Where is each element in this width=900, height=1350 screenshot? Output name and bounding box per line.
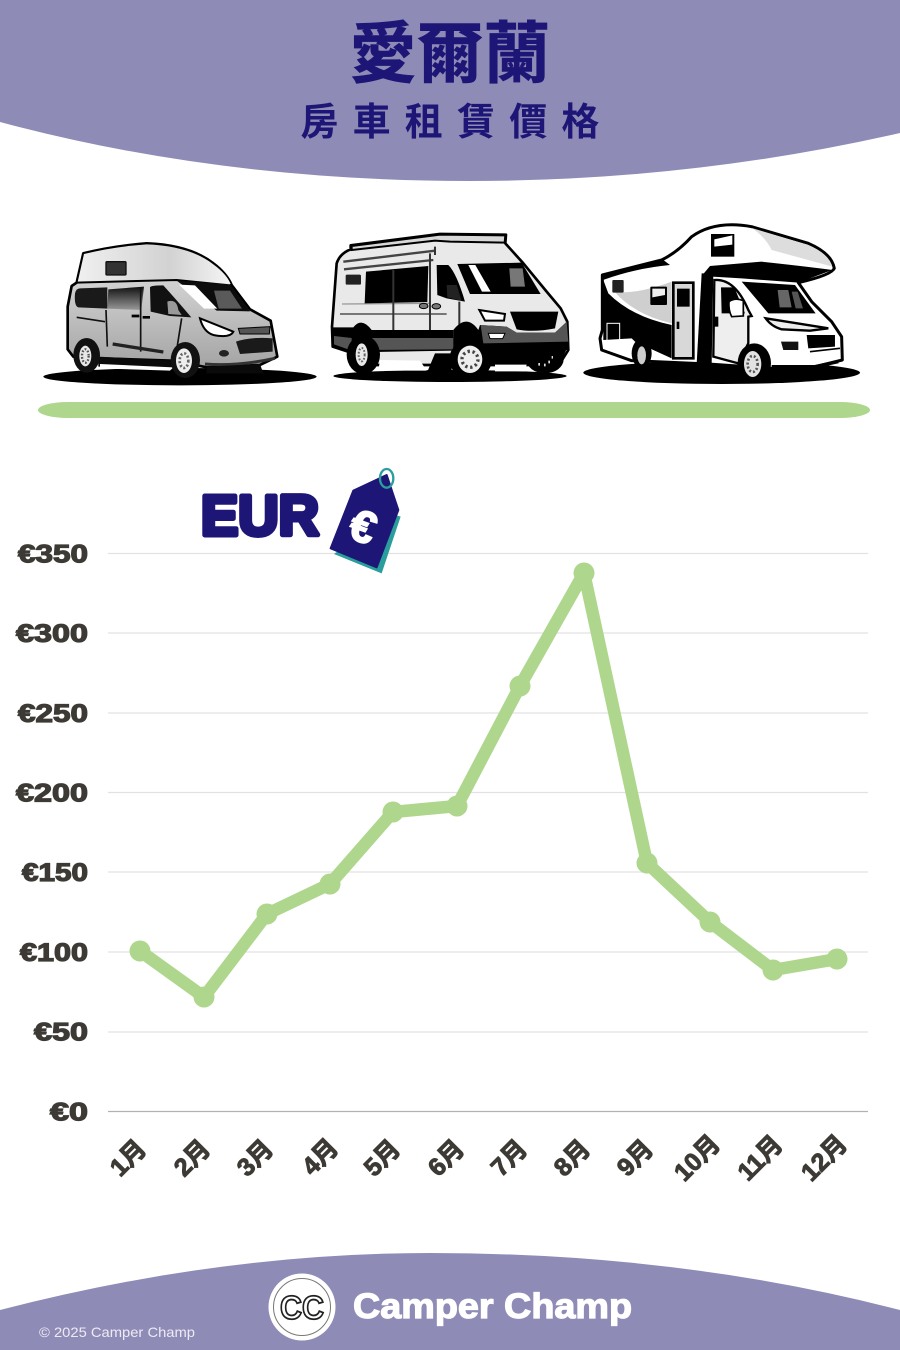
icon: white and black panel van <box>332 234 568 382</box>
y axis labels: €100 <box>20 939 88 967</box>
x axis labels: 12月 <box>796 1130 853 1187</box>
x axis labels: 7月 <box>486 1135 533 1182</box>
icon: silver high-top camper van <box>43 243 317 385</box>
x axis labels: 9月 <box>612 1135 659 1182</box>
x axis labels <box>105 1130 853 1187</box>
x axis labels: 11月 <box>732 1130 788 1186</box>
x axis labels: 3月 <box>232 1135 279 1182</box>
footer banner <box>0 1253 900 1350</box>
header banner <box>0 0 900 181</box>
x axis labels: 10月 <box>669 1130 726 1187</box>
brand name: Camper Champ <box>353 1287 632 1326</box>
logo: CC <box>280 1289 324 1326</box>
subtitle: 房車租賃價格 <box>300 102 614 144</box>
y axis labels: €300 <box>16 620 88 648</box>
line chart <box>16 540 868 1187</box>
logo <box>268 1274 336 1340</box>
currency label: EUR: EUR <box>201 484 319 548</box>
x axis labels: 8月 <box>549 1135 596 1182</box>
y axis labels: €0 <box>50 1098 88 1126</box>
icon: alcove motorhome <box>583 225 860 384</box>
x axis labels: 4月 <box>297 1134 344 1181</box>
y axis labels: €50 <box>34 1018 88 1046</box>
x axis labels: 1月 <box>105 1135 152 1182</box>
data line <box>130 562 848 1008</box>
y axis labels: €250 <box>18 700 88 728</box>
gridlines <box>108 554 868 1112</box>
y axis labels: €350 <box>18 540 88 568</box>
y axis labels: €150 <box>22 859 88 887</box>
icon: euro price tag: € <box>343 498 384 555</box>
y axis labels <box>16 540 88 1126</box>
title: 愛爾蘭 <box>350 17 550 92</box>
green divider bar <box>38 402 870 418</box>
x axis labels: 6月 <box>423 1135 470 1182</box>
copyright: © 2025 Camper Champ <box>39 1324 195 1340</box>
icon: euro price tag <box>331 469 401 573</box>
y axis labels: €200 <box>16 780 88 808</box>
x axis labels: 5月 <box>359 1135 406 1182</box>
x axis labels: 2月 <box>169 1135 216 1182</box>
